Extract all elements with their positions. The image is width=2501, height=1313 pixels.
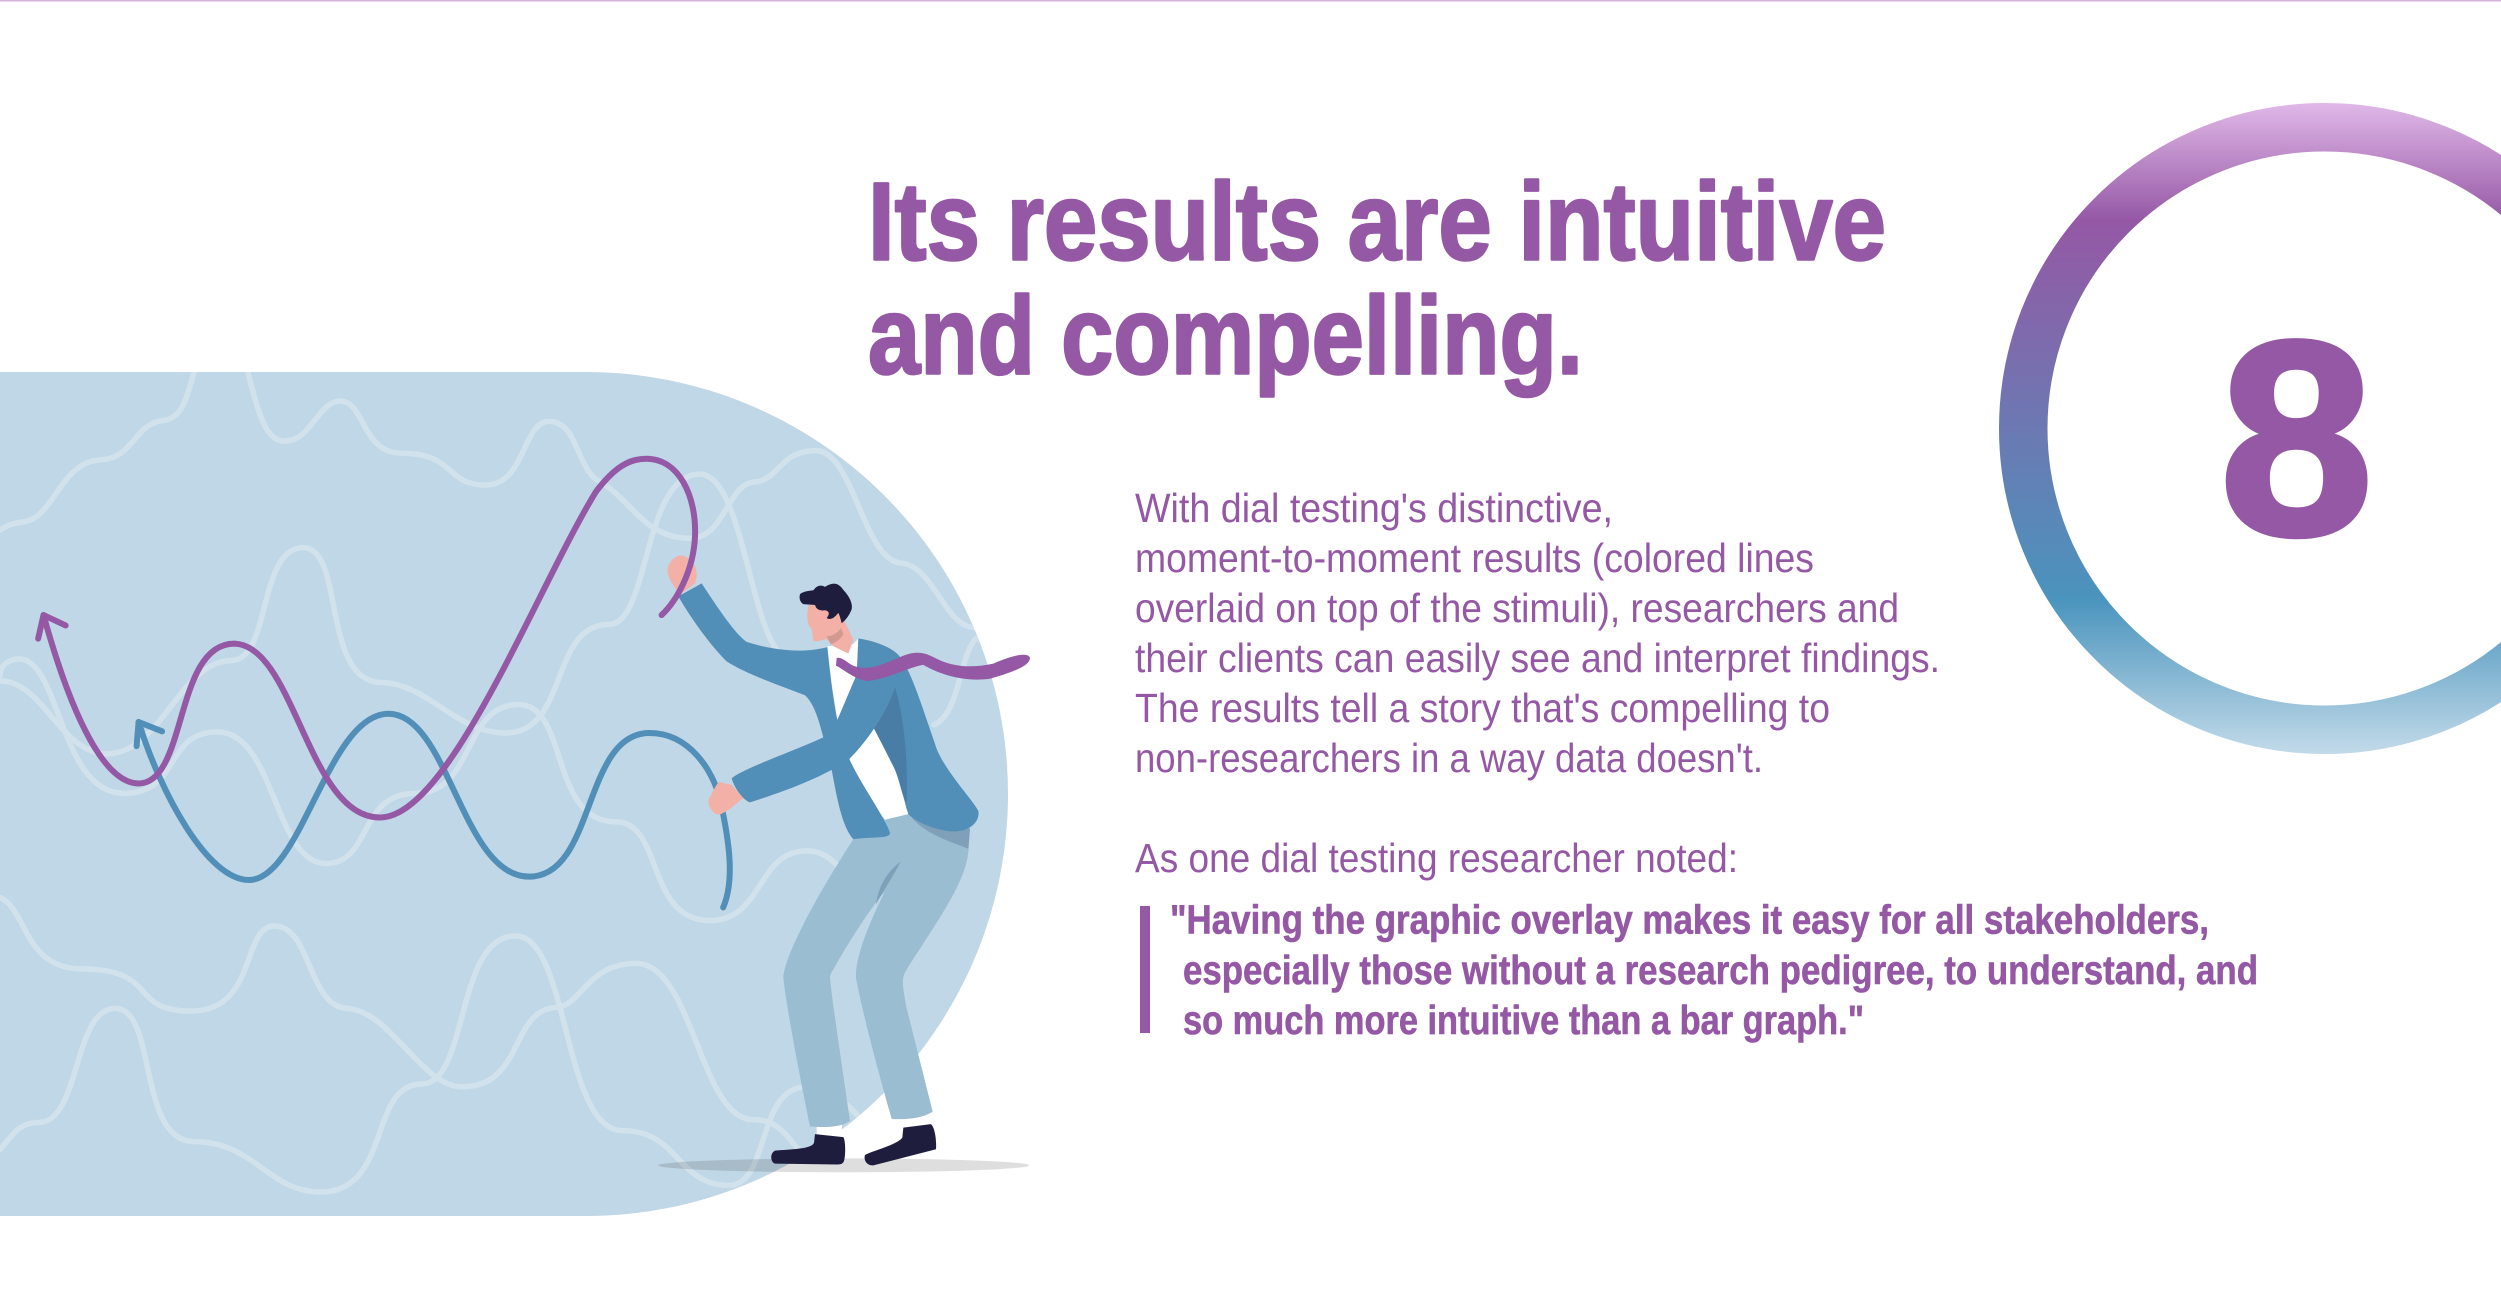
quote text: so much more intuitive than a bar graph." [1183,997,1864,1043]
line chart: blue dial curve with arrow [137,714,730,907]
figure shadow [658,1158,1029,1172]
hair [800,584,852,623]
number 8: 8 [2219,283,2374,593]
body text: their clients can easily see and interpret findings. [1135,635,1940,681]
number ring [2023,127,2501,730]
title: Its results are intuitive [868,160,1886,284]
quote intro: As one dial testing researcher noted: [1135,835,1738,881]
head and neck [807,605,853,654]
illustration: businessman [658,556,1030,1172]
quote text [1170,896,2258,1043]
quote bar [1140,906,1150,1033]
title [868,160,1886,398]
line chart: purple dial curve with arrow [38,459,695,817]
shirt [849,726,908,820]
shoes [771,1134,845,1164]
quote text: especially those without a research pedigree, to understand, and [1183,947,2258,993]
panel: illustration background [0,372,1008,1216]
title: and compelling. [868,274,1583,398]
quote text: "Having the graphic overlay makes it easy for all stakeholders, [1170,896,2209,942]
necktie [836,653,1030,681]
jacket [858,638,979,831]
body text: overlaid on top of the stimuli), researchers and [1135,585,1899,631]
body text [1135,485,1940,781]
hands [668,556,697,594]
body text: With dial testing's distinctive, [1135,485,1613,531]
body text: non-researchers in a way data doesn't. [1135,735,1763,781]
trousers [783,813,970,1127]
body text: The results tell a story that's compelling to [1135,685,1830,731]
body text: moment-to-moment results (colored lines [1135,535,1814,581]
